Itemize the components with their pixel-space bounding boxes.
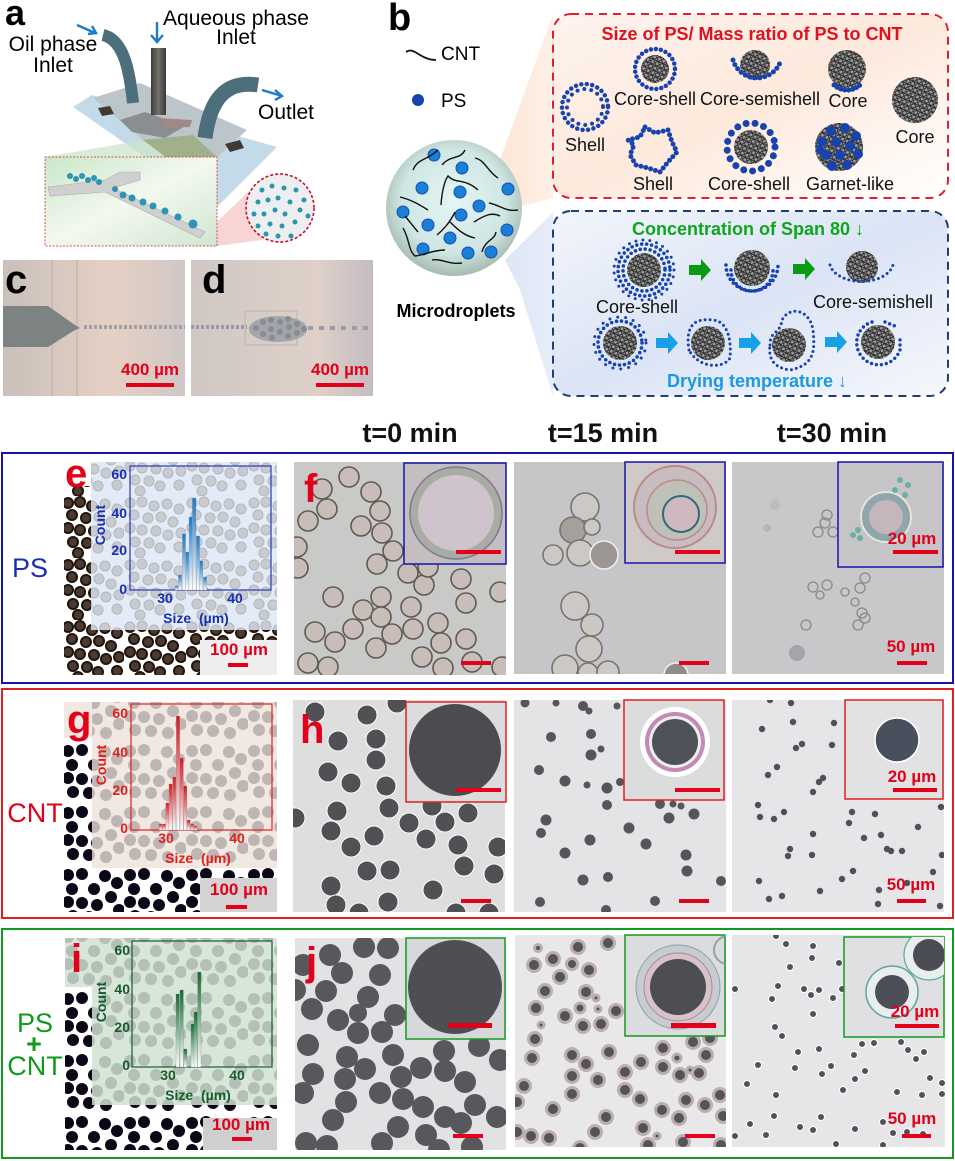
label: core-shell: Core-shell <box>708 174 790 194</box>
box: span and temperature <box>553 211 948 396</box>
panel d: droplet micrograph <box>191 258 373 396</box>
histogram i: 40 <box>229 1067 245 1083</box>
icon: core-shell <box>635 49 675 89</box>
panel g <box>64 698 277 912</box>
header: t=30 min: t=30 min <box>777 418 887 448</box>
label: aqueous phase: Aqueous phase <box>163 7 309 30</box>
panel i <box>65 937 277 1150</box>
icon: temperature 1 <box>594 317 646 369</box>
row: PS + CNT <box>2 929 954 1161</box>
chip body <box>93 83 247 157</box>
histogram i: Count <box>93 981 109 1022</box>
label f: f <box>304 467 318 511</box>
panel d: droplet micrograph: d <box>202 258 226 302</box>
label: garnet-like: Garnet-like <box>806 174 894 194</box>
panel c: channel micrograph <box>3 258 185 396</box>
fan shading <box>500 14 553 210</box>
label e: e <box>65 452 87 496</box>
arrow: aqueous inlet <box>151 22 163 42</box>
scale bar j <box>453 1134 483 1138</box>
icon: temperature 4 <box>857 322 900 365</box>
row label: PS + CNT: PS <box>17 1008 53 1038</box>
histogram e: 40 <box>111 505 127 521</box>
scale bar i: 100 µm <box>212 1115 270 1134</box>
icon: core-semishell <box>733 50 781 80</box>
header: t=15 min: t=15 min <box>548 418 658 448</box>
histogram g: Count <box>93 744 109 785</box>
histogram e: Size (µm) <box>163 610 229 626</box>
histogram g: 40 <box>229 830 245 846</box>
label: oil phase: Oil phase <box>9 33 97 56</box>
green fan <box>45 140 217 210</box>
arrow: green <box>689 259 711 281</box>
panel b: schematic <box>386 0 948 396</box>
row label: CNT: CNT <box>7 798 63 828</box>
histogram g: 60 <box>112 705 128 721</box>
label h: h <box>300 708 324 752</box>
label: inlet: Inlet <box>216 26 256 49</box>
histogram i: 40 <box>114 981 130 997</box>
magnified droplet <box>246 174 314 242</box>
panel j <box>295 937 506 1150</box>
panel: PS + CNT t=30 <box>732 930 954 1148</box>
panel: CNT t=30 <box>732 697 945 912</box>
histogram i: 60 <box>114 942 130 958</box>
histogram i: Size (µm) <box>165 1087 231 1103</box>
panel d: droplet micrograph: 400 µm <box>311 360 369 379</box>
arrow: blue <box>739 332 761 354</box>
histogram i: 0 <box>122 1057 130 1073</box>
icon: shell <box>562 84 608 130</box>
histogram e <box>92 466 271 626</box>
histogram i: 30 <box>160 1067 176 1083</box>
histogram i: 20 <box>114 1019 130 1035</box>
icon: core with PS <box>828 50 866 90</box>
label j: j <box>305 940 317 984</box>
histogram i <box>93 941 272 1103</box>
icon: deformed shell <box>628 127 677 172</box>
histogram e: 30 <box>157 590 173 606</box>
panel c: channel micrograph: c <box>5 258 27 302</box>
inset f <box>404 463 506 564</box>
dark spot <box>789 645 805 661</box>
label: outlet: Outlet <box>258 101 314 124</box>
inset PS t=15 <box>625 462 725 563</box>
label: shell: Shell <box>565 135 605 155</box>
pink fan <box>217 190 262 246</box>
panel c: channel micrograph: 400 µm <box>121 360 179 379</box>
scale bar <box>685 1134 715 1138</box>
row label: PS: PS <box>12 553 48 583</box>
icon: core <box>892 77 938 123</box>
aqueous inlet cylinder <box>151 48 166 115</box>
row: PS <box>2 452 953 687</box>
arrow: blue <box>656 332 678 354</box>
scale bar: 50 µm <box>887 637 935 656</box>
label: shell: Shell <box>633 174 673 194</box>
panel h <box>293 700 507 912</box>
arrow: green <box>793 258 815 280</box>
inset CNT t=30: 20 µm <box>888 767 936 786</box>
oil tube <box>103 35 133 103</box>
row label: PS + CNT: CNT <box>7 1051 63 1081</box>
scale bar g: 100 µm <box>210 880 268 899</box>
icon: partial shell <box>726 250 778 291</box>
label: drying temperature: Drying temperature ↓ <box>667 371 847 391</box>
label: core-shell: Core-shell <box>614 89 696 109</box>
scale bar <box>679 899 709 903</box>
scale bar: 50 µm <box>888 1109 936 1128</box>
heading: size of PS: Size of PS/ Mass ratio of PS to CNT <box>601 24 903 44</box>
inset PS t=30 <box>838 462 943 567</box>
legend: CNT <box>406 44 480 65</box>
histogram g: 20 <box>112 782 128 798</box>
scale bar f <box>461 661 491 665</box>
inset PS + CNT t=15 <box>624 934 726 1037</box>
arrow: outlet <box>262 90 282 100</box>
outlet tube <box>205 84 258 138</box>
inset PS + CNT t=30 <box>843 936 945 1038</box>
histogram e: 20 <box>111 542 127 558</box>
label: core-semishell: Core-semishell <box>813 292 933 312</box>
label i: i <box>71 937 82 981</box>
panel a: microfluidic device <box>5 0 314 246</box>
row: CNT <box>2 689 953 923</box>
channel inset <box>45 157 217 246</box>
scale bar <box>887 875 935 903</box>
arrow: oil inlet <box>77 25 96 34</box>
arrow: blue <box>825 331 847 353</box>
scale bar <box>679 661 709 665</box>
panel e <box>64 452 277 675</box>
label: core: Core <box>828 91 868 111</box>
inset j <box>406 938 505 1039</box>
glass plate <box>73 95 277 207</box>
scale bar: 50 µm <box>887 875 935 894</box>
panel: CNT t=15 <box>514 698 726 915</box>
panel f <box>287 462 512 678</box>
label: core right: Core <box>895 127 935 147</box>
histogram e: 60 <box>111 466 127 482</box>
histogram g: 30 <box>158 830 174 846</box>
panel: PS t=15 <box>514 462 726 687</box>
inset h <box>406 702 506 802</box>
histogram g: 0 <box>120 820 128 836</box>
legend: CNT: CNT <box>441 44 480 65</box>
histogram e: 40 <box>227 590 243 606</box>
histogram g: Size (µm) <box>165 850 231 866</box>
box: size and mass ratio <box>553 14 948 198</box>
label g: g <box>67 698 91 742</box>
inset CNT t=15 <box>624 700 724 800</box>
label: core-semishell: Core-semishell <box>700 89 820 109</box>
histogram e: 0 <box>119 581 127 597</box>
scale bar e: 100 µm <box>210 640 268 659</box>
icon: core-shell with large PS <box>727 123 775 171</box>
icon: garnet-like <box>815 123 863 171</box>
panel: PS + CNT t=15 <box>515 934 726 1147</box>
inset PS t=30: 20 µm <box>888 529 936 548</box>
row label: PS + CNT <box>7 1008 63 1081</box>
histogram e: Count <box>92 504 108 545</box>
label: microdroplets: Microdroplets <box>396 301 516 321</box>
panel: PS t=30 <box>732 462 944 674</box>
histogram g <box>93 704 272 866</box>
inset PS + CNT t=30: 20 µm <box>891 1002 939 1021</box>
legend: PS: PS <box>441 91 466 112</box>
scale bar h <box>461 899 491 903</box>
icon: semishell <box>830 251 893 283</box>
label: core-shell: Core-shell <box>596 297 678 317</box>
heading: span 80: Concentration of Span 80 ↓ <box>632 219 864 239</box>
icon: thick core-shell <box>614 240 674 300</box>
inset CNT t=30 <box>845 700 943 799</box>
row label: PS + CNT: + <box>26 1029 42 1059</box>
scale bar g <box>210 880 268 909</box>
microdroplet sphere <box>386 140 522 276</box>
histogram g: 40 <box>112 744 128 760</box>
scale bar <box>887 637 935 665</box>
legend: PS <box>412 91 466 112</box>
label: inlet: Inlet <box>33 54 73 77</box>
icon: temperature 2 <box>688 320 730 365</box>
icon: temperature 3 <box>770 311 814 370</box>
header: t=0 min: t=0 min <box>362 418 458 448</box>
scale bar <box>888 1109 936 1138</box>
